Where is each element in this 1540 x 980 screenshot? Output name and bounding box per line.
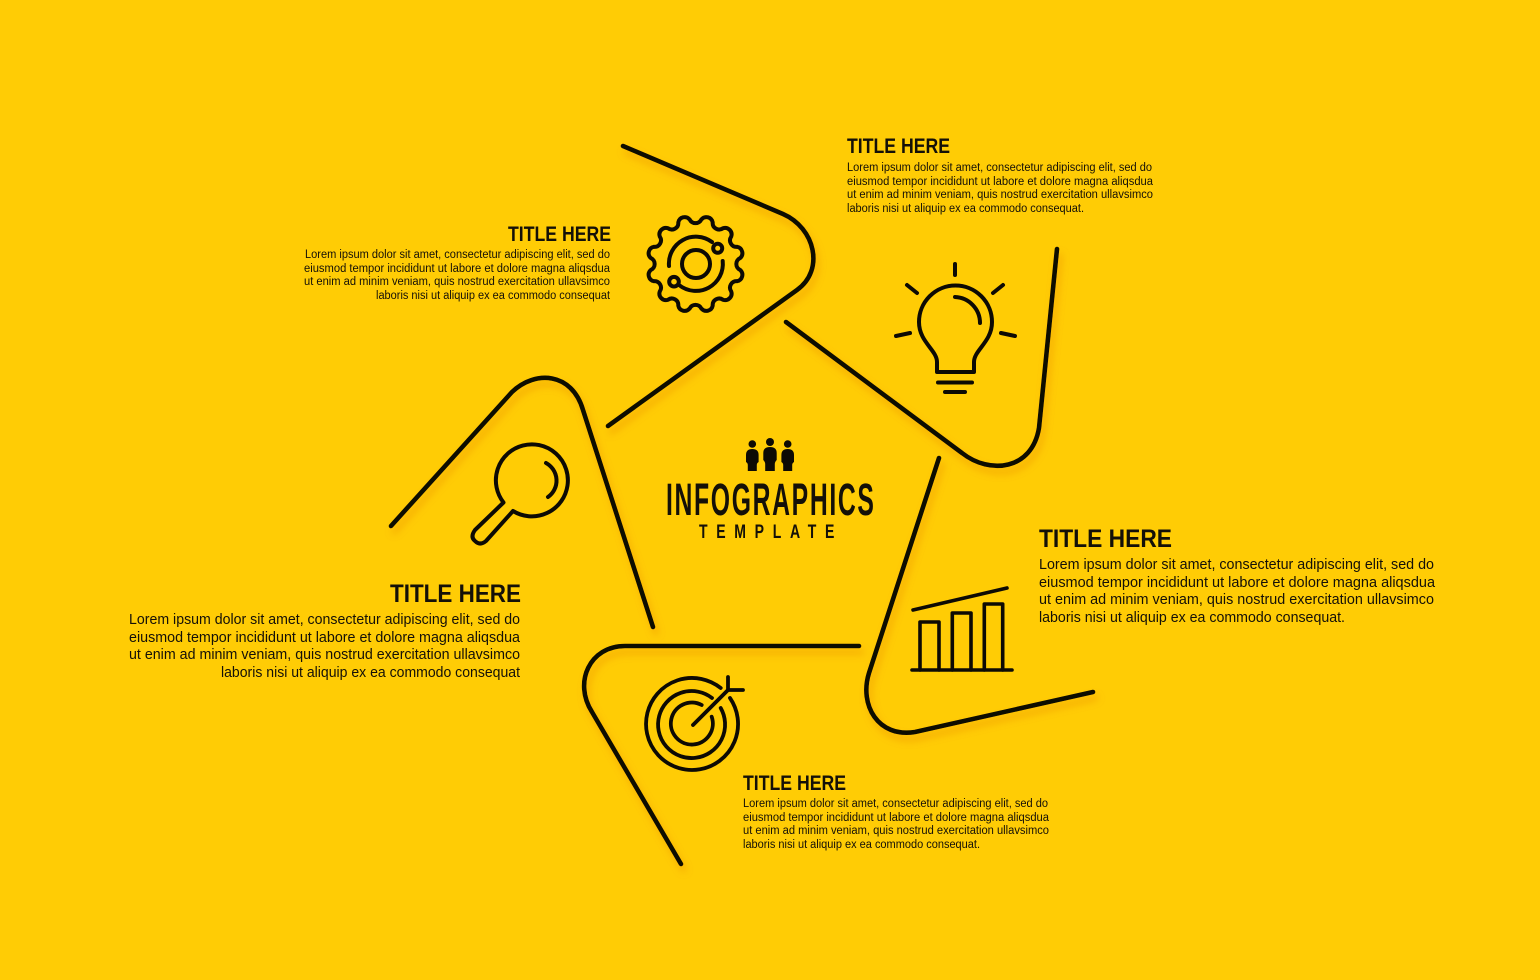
text block: top left: [304, 223, 611, 302]
icon: bar chart: [912, 588, 1012, 670]
text block: left: [129, 580, 521, 681]
block body: ut enim ad minim veniam, quis nostrud exercitation ullavsimco: [304, 276, 610, 288]
block body: eiusmod tempor incididunt ut labore et dolore magna aliqsdua: [1039, 575, 1436, 591]
block body: laboris nisi ut aliquip ex ea commodo consequat.: [1039, 610, 1345, 626]
block body: ut enim ad minim veniam, quis nostrud exercitation ullavsimco: [1039, 592, 1434, 608]
icon: target with arrow: [646, 677, 743, 770]
block body: laboris nisi ut aliquip ex ea commodo consequat: [221, 665, 520, 681]
block body: laboris nisi ut aliquip ex ea commodo consequat.: [847, 203, 1084, 215]
block body: laboris nisi ut aliquip ex ea commodo consequat: [376, 290, 611, 302]
block body: Lorem ipsum dolor sit amet, consectetur adipiscing elit, sed do: [305, 249, 610, 261]
block body: [1039, 557, 1436, 626]
block title: TITLE HERE: [508, 223, 611, 246]
segment: chart panel outline: [866, 458, 1093, 733]
block body: [304, 249, 611, 302]
segment: bulb panel outline: [786, 249, 1057, 466]
block body: eiusmod tempor incididunt ut labore et dolore magna aliqsdua: [847, 176, 1154, 188]
block body: [129, 612, 521, 681]
block body: Lorem ipsum dolor sit amet, consectetur adipiscing elit, sed do: [743, 798, 1048, 810]
outline: pentagon arrow segments: [391, 146, 1093, 864]
block body: Lorem ipsum dolor sit amet, consectetur adipiscing elit, sed do: [129, 612, 520, 628]
block body: eiusmod tempor incididunt ut labore et dolore magna aliqsdua: [304, 263, 611, 275]
block body: ut enim ad minim veniam, quis nostrud exercitation ullavsimco: [129, 647, 520, 663]
segment: target panel outline: [584, 646, 859, 864]
block body: eiusmod tempor incididunt ut labore et dolore magna aliqsdua: [743, 812, 1050, 824]
block body: [847, 162, 1154, 215]
block title: TITLE HERE: [1039, 525, 1172, 553]
block body: laboris nisi ut aliquip ex ea commodo consequat.: [743, 839, 980, 851]
icon: light bulb: [896, 264, 1015, 392]
block title: TITLE HERE: [743, 772, 846, 795]
block body: Lorem ipsum dolor sit amet, consectetur adipiscing elit, sed do: [847, 162, 1152, 174]
main heading: INFOGRAPHICS: [666, 474, 874, 525]
icon: magnifier: [472, 444, 568, 544]
block body: Lorem ipsum dolor sit amet, consectetur adipiscing elit, sed do: [1039, 557, 1434, 573]
segment: magnifier panel outline: [391, 378, 653, 627]
text block: bottom: [743, 772, 1050, 851]
segment: gear panel outline: [608, 146, 813, 426]
text block: top right: [847, 135, 1154, 215]
subheading: TEMPLATE: [699, 521, 834, 543]
block title: TITLE HERE: [390, 580, 521, 608]
block body: ut enim ad minim veniam, quis nostrud exercitation ullavsimco: [743, 825, 1049, 837]
center heading: [666, 438, 874, 543]
icon: three people: [746, 438, 794, 471]
block title: TITLE HERE: [847, 135, 950, 158]
block body: ut enim ad minim veniam, quis nostrud exercitation ullavsimco: [847, 189, 1153, 201]
icon: gear with orbit: [649, 217, 742, 311]
block body: eiusmod tempor incididunt ut labore et dolore magna aliqsdua: [129, 630, 521, 646]
text block: right: [1039, 525, 1436, 626]
block body: [743, 798, 1050, 851]
